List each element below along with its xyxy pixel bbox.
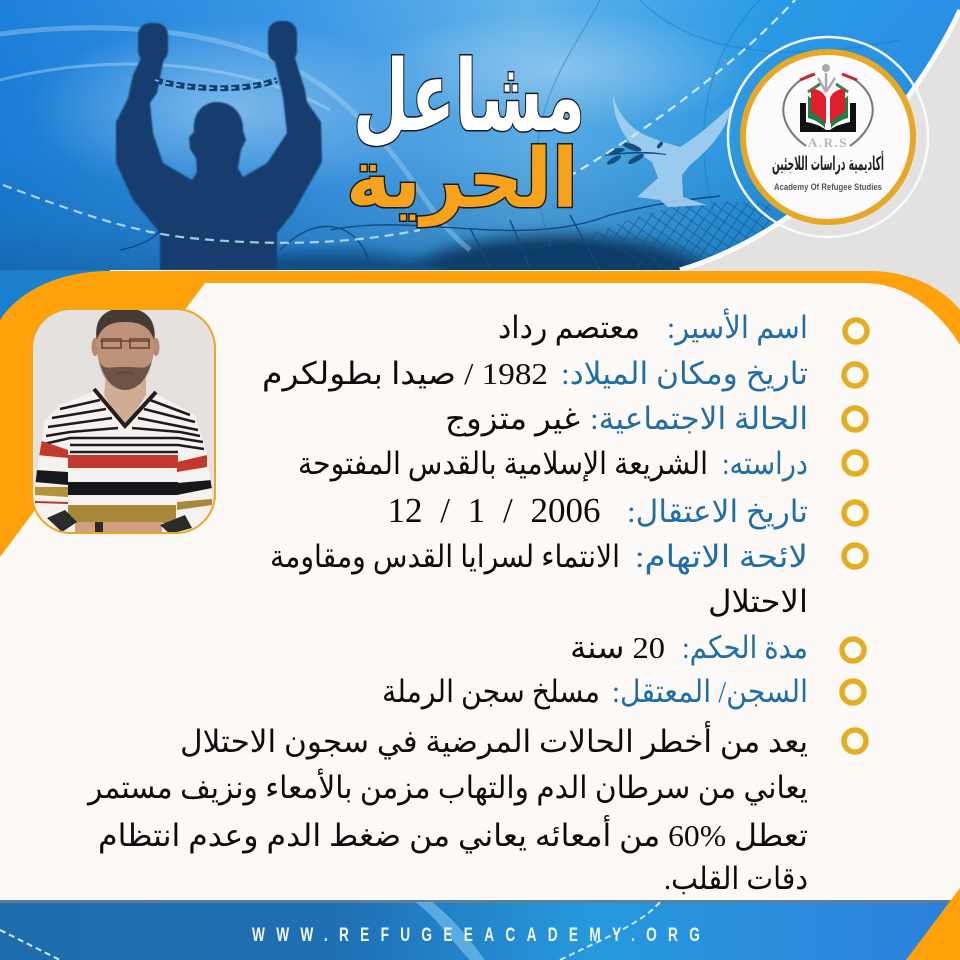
footer band — [0, 900, 960, 960]
row: marital status — [445, 401, 808, 437]
row: charges: لائحة الاتهام: — [635, 539, 808, 575]
row: studies: دراسته: — [722, 446, 808, 482]
dashed flight lines — [3, 0, 795, 243]
row: sentence: 20 سنة — [570, 630, 665, 665]
row: prisoner name — [498, 308, 808, 346]
logo badge — [728, 37, 928, 237]
row: charges: الاحتلال — [708, 584, 808, 619]
website address: WWW.REFUGEEACADEMY.ORG — [252, 924, 700, 946]
title: first word: مشاعل — [353, 40, 585, 154]
medical condition paragraph — [86, 721, 808, 896]
white curve bounding the banner — [680, 10, 960, 270]
row: prison: مسلخ سجن الرملة — [382, 674, 600, 710]
medical condition paragraph: يعاني من سرطان الدم والتهاب مزمن بالأمعاء ونزيف مستمر — [86, 768, 808, 806]
row: studies: الشريعة الإسلامية بالقدس المفتوحة — [298, 446, 708, 482]
row: prisoner name: اسم الأسير: — [667, 308, 808, 346]
row: sentence — [570, 630, 808, 666]
row: birth date and place: تاريخ ومكان الميلاد: — [561, 356, 808, 392]
barbed wire — [120, 195, 720, 270]
header banner artwork — [0, 0, 960, 270]
logo English name: Academy Of Refugee Studies — [774, 182, 882, 192]
photo: sweater V-neck — [94, 389, 156, 426]
icon: dove — [613, 95, 732, 207]
blue corner left of the orange frame — [0, 268, 110, 324]
medical condition paragraph: تعطل %60 من أمعائه يعاني من ضغط الدم وعدم انتظام — [98, 815, 808, 854]
row: arrest date: تاريخ الاعتقال: — [627, 494, 808, 530]
orange corner wedge in the footer — [906, 888, 960, 960]
medical condition paragraph: يعد من أخطر الحالات المرضية في سجون الاحتلال — [180, 721, 808, 760]
row: sentence: مدة الحكم: — [682, 630, 808, 666]
row: charges — [270, 539, 808, 619]
row: prison: السجن/ المعتقل: — [612, 674, 808, 710]
orange frame around the content panel — [0, 271, 960, 557]
logo initials: A.R.S — [808, 135, 848, 150]
photo: striped sweater — [34, 392, 213, 532]
row: birth date and place — [262, 356, 808, 392]
medical condition paragraph: دقات القلب. — [664, 861, 808, 896]
row: charges: الانتماء لسرايا القدس ومقاومة — [270, 539, 620, 575]
silhouette of prisoner with raised fists — [116, 21, 322, 270]
chain between the wrists — [155, 80, 277, 88]
row: arrest date — [388, 491, 808, 530]
gray corner behind the header — [640, 0, 960, 315]
icon: olive branch — [605, 141, 666, 166]
photo: head and neck — [92, 308, 160, 428]
row: prisoner name: معتصم رداد — [498, 310, 640, 346]
row: birth date and place: 1982 / صيدا بطولكرم — [262, 356, 548, 392]
row: arrest date: 12 / 1 / 2006 — [388, 491, 600, 530]
portrait photo — [30, 308, 220, 535]
logo emblem: book and arcs — [783, 64, 873, 146]
row: marital status: غير متزوج — [445, 401, 580, 437]
row: marital status: الحالة الاجتماعية: — [590, 401, 808, 436]
row: prison — [382, 674, 808, 710]
profile list bullets — [842, 320, 867, 752]
title: second word: الحرية — [346, 132, 578, 227]
